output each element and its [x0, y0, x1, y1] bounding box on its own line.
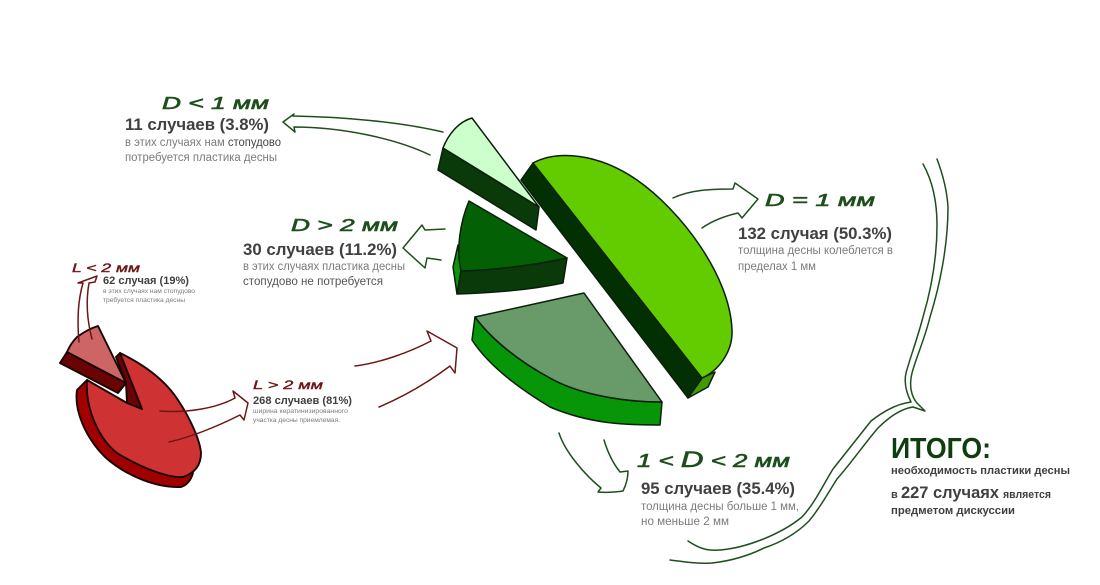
arrow: L > 2 mm to main pie [355, 331, 457, 407]
slice: D > 2 mm [453, 201, 567, 294]
label block: D > 2 mm: стопудово не потребуется [243, 276, 383, 288]
label block: 1 < D < 2 mm [637, 447, 799, 528]
label block: L > 2 mm: L > 2 мм [253, 378, 323, 392]
label block: D < 1 mm [125, 93, 281, 164]
summary text block: 227 случаях [901, 483, 1000, 502]
slice: D = 1 mm [521, 156, 732, 398]
arrow: to D = 1 mm [673, 183, 758, 228]
label block: 1 < D < 2 mm: толщина десны больше 1 мм, [641, 501, 799, 513]
label block: D = 1 mm: пределах 1 мм [738, 261, 816, 273]
slice: 1 < D < 2 mm [472, 293, 662, 425]
pie chart: gum thickness D [438, 118, 732, 425]
summary text block: является [1003, 489, 1051, 501]
label block: L < 2 mm: L < 2 мм [72, 261, 140, 275]
label block: D = 1 mm: D = 1 мм [765, 190, 875, 210]
summary text block [891, 433, 1070, 517]
arrow: to D < 1 mm [283, 114, 443, 155]
label block: D > 2 mm [243, 215, 405, 288]
arrow: to 1 < D < 2 mm [559, 433, 628, 492]
arrow: to D > 2 mm [403, 225, 445, 268]
arrow: L < 2 mm [78, 276, 97, 342]
label block: L < 2 mm: 62 случая (19%) [103, 275, 189, 287]
label block: D > 2 mm: D > 2 мм [291, 215, 398, 235]
label block: D = 1 mm [738, 190, 893, 273]
slice: L < 2 mm [60, 326, 126, 393]
label block: L < 2 mm [72, 261, 195, 304]
label block: D > 2 mm: 30 случаев (11.2%) [243, 240, 397, 259]
label block: D > 2 mm: в этих случаях пластика десны [243, 261, 405, 273]
slice: D < 1 mm [438, 118, 539, 230]
label block: D < 1 mm: 11 случаев (3.8%) [125, 115, 269, 134]
label block: L > 2 mm [253, 378, 352, 424]
summary text block: необходимость пластики десны [891, 465, 1070, 477]
arrow: L > 2 mm [160, 391, 248, 442]
label block: L < 2 mm: требуется пластика десны [103, 296, 185, 304]
label block: 1 < D < 2 mm: 95 случаев (35.4%) [641, 479, 795, 498]
summary text block: в [891, 489, 898, 501]
label block: D < 1 mm: потребуется пластика десны [125, 152, 277, 164]
pie chart: keratinized width L [60, 326, 201, 487]
label block: 1 < D < 2 mm: но меньше 2 мм [641, 516, 729, 528]
summary text block: предметом дискуссии [891, 505, 1015, 517]
label block: L > 2 mm: участка десны приемлемая. [253, 417, 340, 424]
label block: L < 2 mm: в этих случаях нам стопудово [103, 288, 195, 295]
label block: L > 2 mm: 268 случаев (81%) [253, 395, 352, 407]
label block: L > 2 mm: ширина кератинизированного [253, 408, 348, 415]
label block: D < 1 mm: в этих случаях нам стопудово [125, 137, 281, 149]
label block: D = 1 mm: толщина десны колеблется в [738, 245, 893, 257]
slice: L > 2 mm [77, 353, 201, 487]
summary text block: ИТОГО: [891, 433, 991, 465]
brace: summary bracket [670, 159, 948, 563]
label block: D < 1 mm: D < 1 мм [162, 93, 269, 113]
label block: D = 1 mm: 132 случая (50.3%) [738, 224, 892, 243]
label block: 1 < D < 2 mm: 1 < D < 2 мм [637, 447, 790, 472]
